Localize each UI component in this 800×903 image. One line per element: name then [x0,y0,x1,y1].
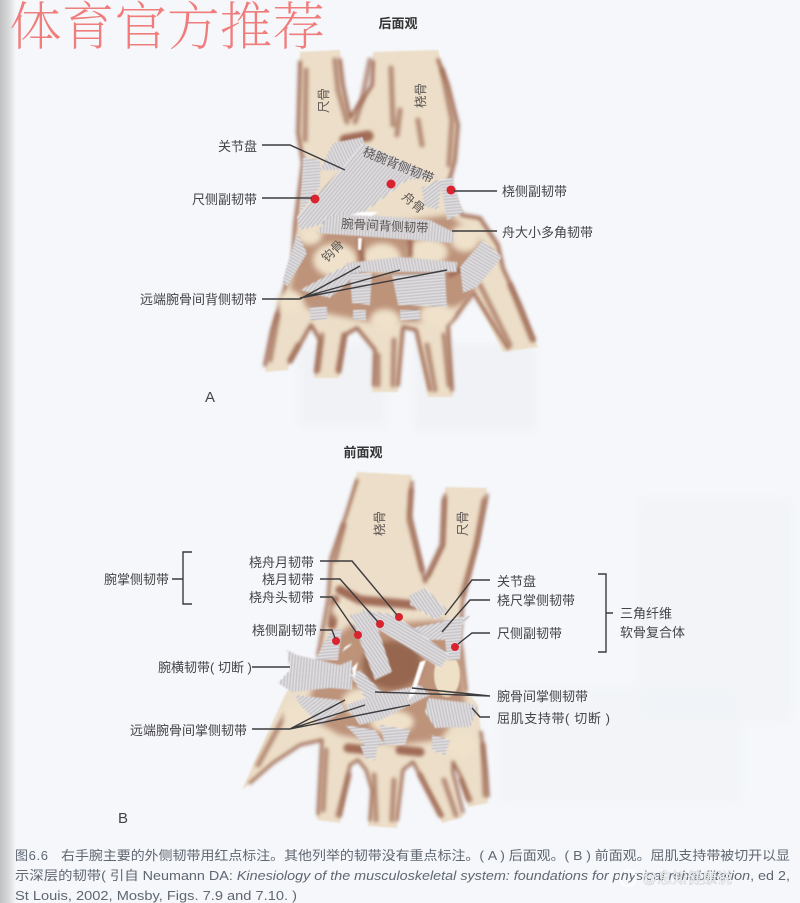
illustration B: anterior wrist [242,472,490,828]
figure caption: 右手腕主要的外侧韧带用红点标注。其他列举的韧带没有重点标注。( A ) 后面观。( B ) 前面观。屈肌支持带被切开以显 [61,848,790,863]
figure caption [15,848,790,903]
panel letter A: A [205,389,215,406]
radioscaphocapitate ligament [350,610,392,680]
hand silhouette B [242,472,488,828]
carpal bones A [277,136,490,331]
source watermark: @息知健康说 [642,870,732,887]
labels A [140,139,593,307]
bone labels A: 舟骨 [399,190,427,216]
red dots A [310,180,456,204]
heading: anterior view: 前面观 [343,445,383,460]
ulnar collateral ligament B [443,616,463,660]
scaphoid bone [380,182,430,214]
leader lines B [252,561,490,729]
labels B: 远端腕骨间掌侧韧带 [130,723,247,738]
labels B: 桡月韧带 [262,572,314,587]
labels B: 桡尺掌侧韧带 [497,593,575,608]
ligaments B [278,588,478,760]
heading: posterior view: 后面观 [378,16,418,31]
bone labels B [372,511,470,536]
bone labels A: 钩骨 [319,238,347,265]
illustration A: posterior wrist [262,50,538,397]
labels B: 屈肌支持带( 切断 ) [497,711,610,726]
articular disc ligament B [410,588,447,620]
labels B: 腕骨间掌侧韧带 [497,689,588,704]
bracket: palmar carpal ligaments [104,552,192,604]
labels B [130,555,610,738]
carpal bones B [282,602,476,758]
radial collateral ligament A [440,177,463,220]
labels B: 桡舟月韧带 [249,555,314,570]
bone labels B: 尺骨 [456,511,470,536]
labels A: 舟大小多角韧带 [502,225,593,240]
bracket: palmar carpal ligaments: 腕掌侧韧带 [104,572,169,587]
figure caption: 图6.6 [15,848,48,863]
ligaments A [283,137,502,320]
flexor retinaculum [425,698,478,728]
panel letter B: B [118,810,128,827]
figure caption: St Louis, 2002, Mosby, Figs. 7.9 and 7.10. ) [15,888,297,903]
bone labels A: 桡腕背侧韧带 [361,144,436,186]
labels B: 桡舟头韧带 [249,590,314,605]
labels B: 关节盘 [497,574,536,589]
bone labels A [317,83,436,265]
bone labels B: 桡骨 [372,511,387,536]
transverse carpal ligament [278,650,352,692]
labels B: 桡侧副韧带 [252,623,317,638]
bone labels A: 腕骨间背侧韧带 [341,216,429,236]
articular disc ligament [320,137,365,170]
red dots B [332,613,459,651]
labels B: 尺侧副韧带 [497,626,562,641]
ulnar collateral ligament A [300,157,320,213]
leader lines A [262,145,497,299]
labels A: 远端腕骨间背侧韧带 [140,292,257,307]
labels B: 腕横韧带( 切断 ) [158,660,252,675]
radiolunate ligament [362,610,450,668]
labels A: 关节盘 [218,139,257,154]
labels A: 尺侧副韧带 [192,192,257,207]
bracket: triangular fibrocartilage complex [598,574,685,652]
dorsal radiocarpal ligament [297,143,437,230]
bracket: triangular fibrocartilage complex: 三角纤维 [620,606,672,621]
bone labels A: 桡骨 [413,83,428,108]
labels A: 桡侧副韧带 [502,184,567,199]
bracket: triangular fibrocartilage complex: 软骨复合体 [620,625,685,640]
hand silhouette A [265,50,538,397]
dorsal intercarpal ligament [317,213,455,243]
figure caption: 示深层的韧带( 引自 Neumann DA: Kinesiology of the musculoskeletal system: foundations for physical rehabilitation , ed 2, [15,868,790,883]
watermark title: 体育官方推荐 [9,0,325,57]
radial collateral ligament B [315,628,342,660]
bone labels A: 尺骨 [317,88,331,113]
